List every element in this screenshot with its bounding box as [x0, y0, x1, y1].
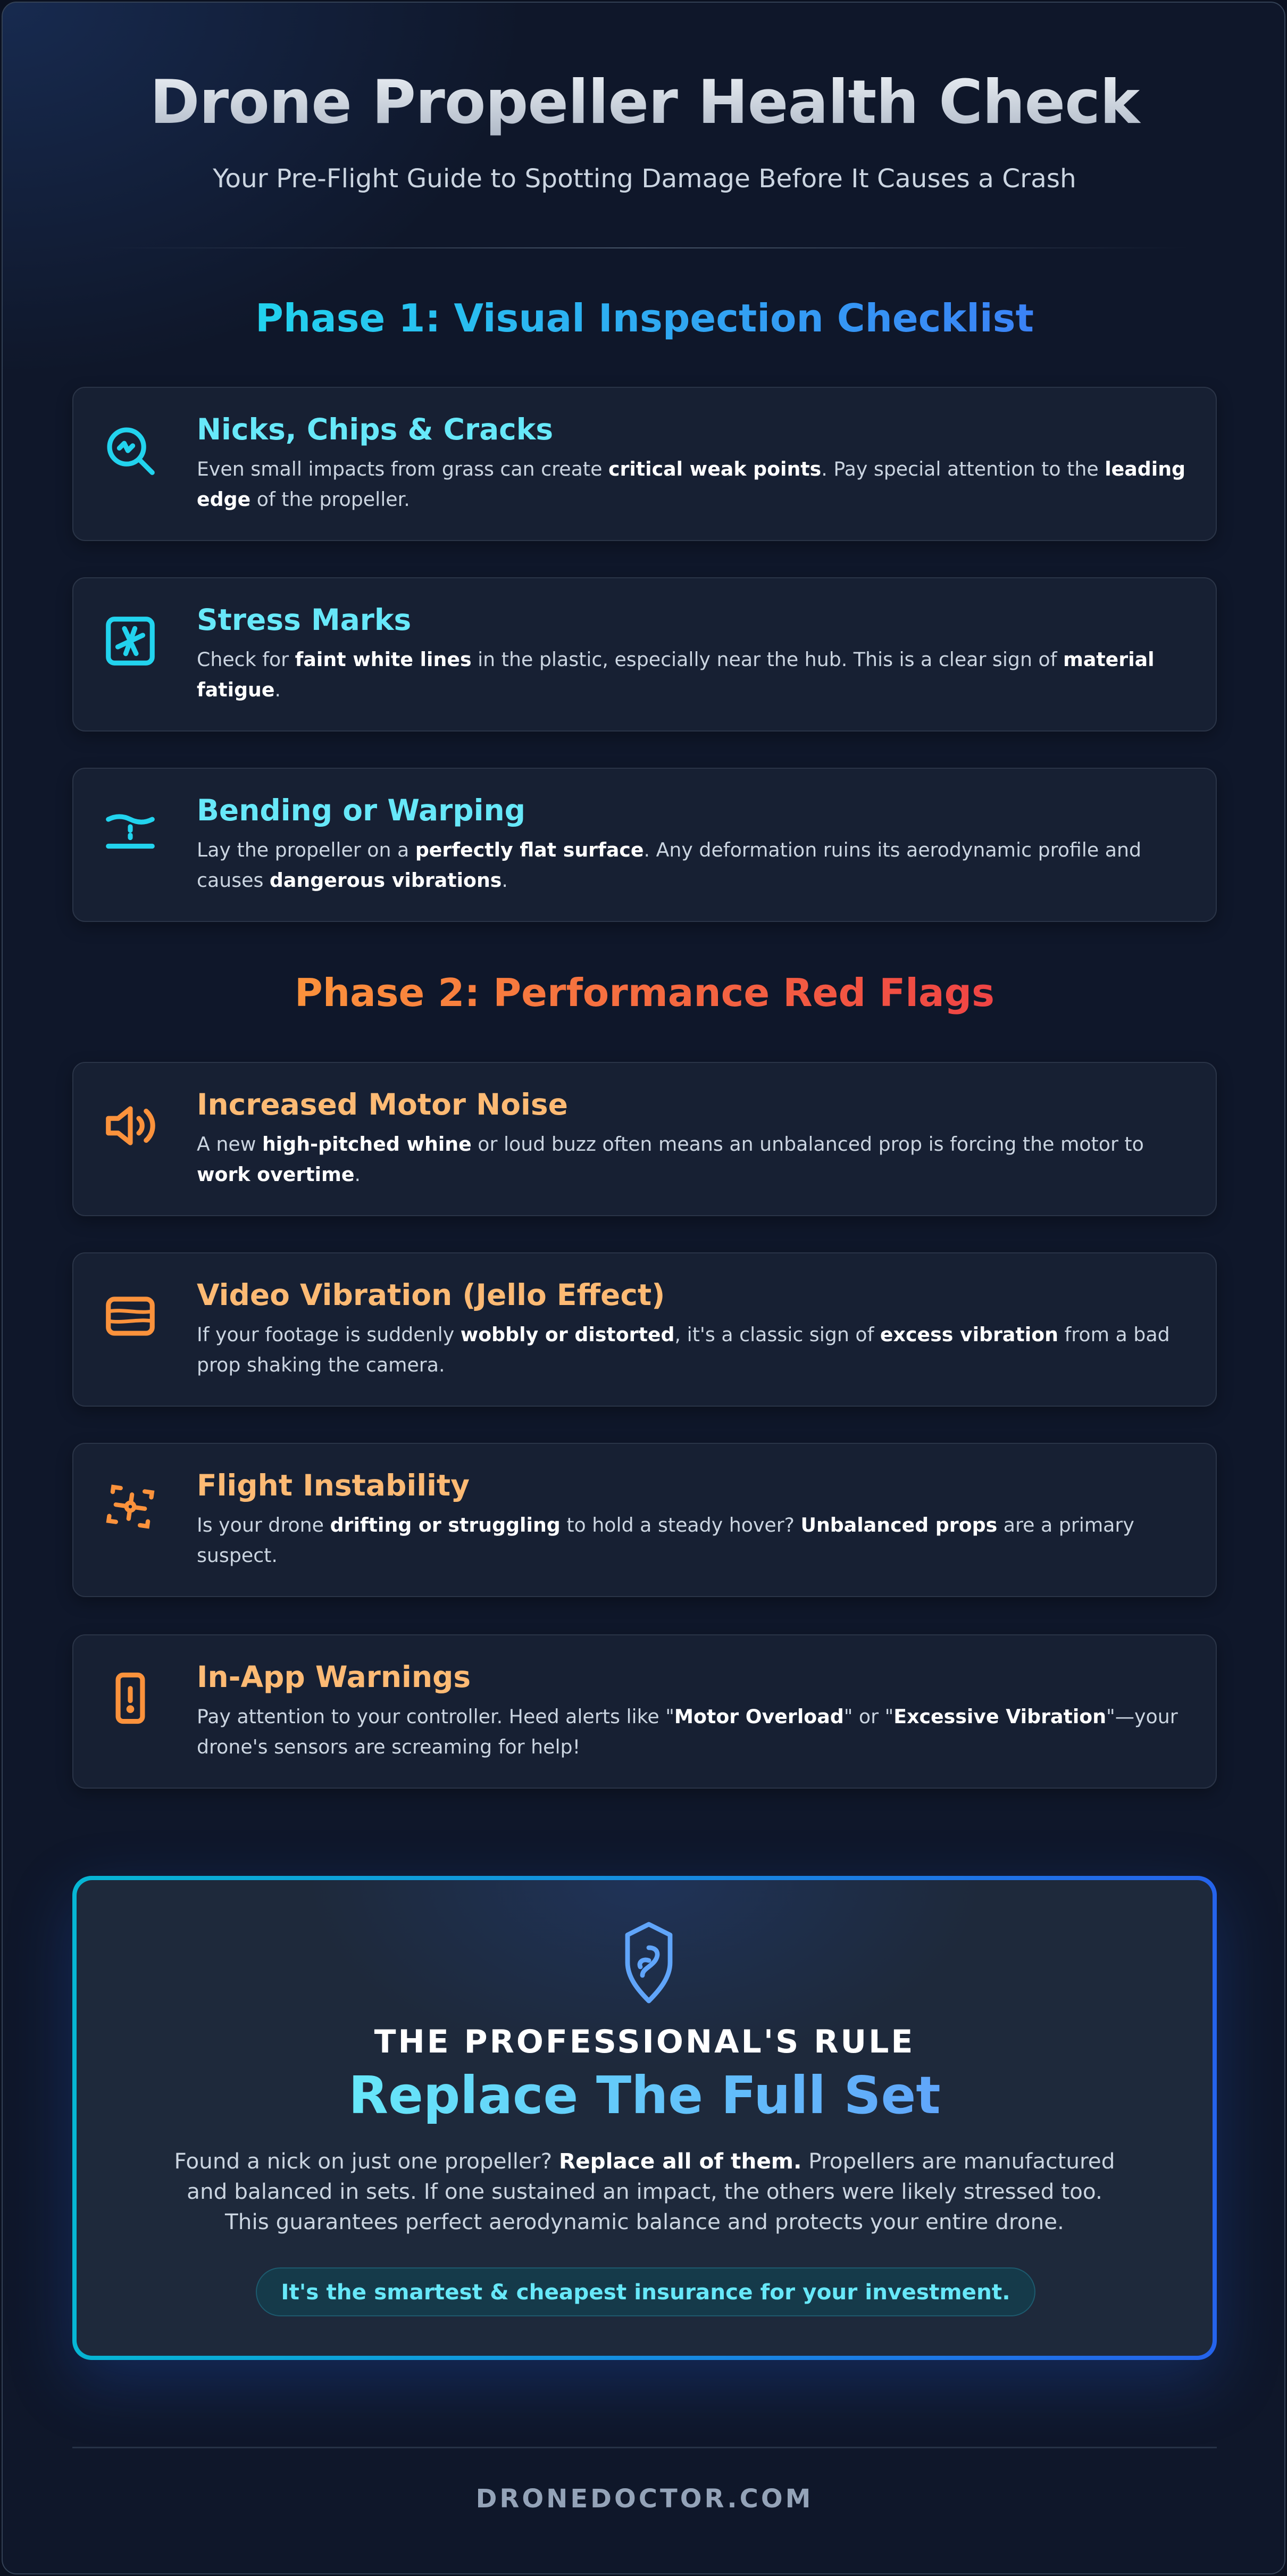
card: motor noise: A new high-pitched whine or loud buzz often means an unbalanced prop is forcing the motor to work overtime.: [197, 1133, 1144, 1186]
card: nicks chips cracks: [72, 387, 1217, 541]
subtitle: Your Pre-Flight Guide to Spotting Damage Before It Causes a Crash: [213, 164, 1076, 194]
icon: stress box: [106, 617, 155, 666]
heading: phase 1: Phase 1: Visual Inspection Checklist: [255, 296, 1034, 340]
card: in-app warnings: In-App Warnings: [197, 1660, 471, 1694]
card: nicks chips cracks: Nicks, Chips & Cracks: [197, 412, 553, 446]
callout label: THE PROFESSIONAL'S RULE: [374, 2023, 915, 2060]
card: video vibration: Video Vibration (Jello Effect): [197, 1278, 665, 1312]
icon: speaker: [106, 1106, 155, 1145]
card: in-app warnings: Pay attention to your controller. Heed alerts like "Motor Overload" or "Excessive Vibration"—your drone's sensors are screaming for help!: [197, 1705, 1178, 1758]
card: bending: Bending or Warping: [197, 793, 525, 827]
pill: insurance note: [256, 2267, 1035, 2316]
title: [3, 62, 1286, 142]
icon: shield: [625, 1922, 672, 2004]
icon: jello frame: [106, 1297, 155, 1336]
card: flight instability: Is your drone drifting or struggling to hold a steady hover? Unbalanced props are a primary suspect.: [197, 1514, 1134, 1567]
card: bending: Lay the propeller on a perfectly flat surface. Any deformation ruins its aerodynamic profile and causes dangerous vibrations.: [197, 838, 1141, 892]
title: Drone Propeller Health Check: [150, 67, 1139, 137]
card: in-app warnings: [72, 1634, 1217, 1789]
card: flight instability: [72, 1443, 1217, 1597]
card: video vibration: [72, 1252, 1217, 1407]
card: video vibration: If your footage is suddenly wobbly or distorted, it's a classic sign of excess vibration from a bad prop shaking the camera.: [197, 1323, 1170, 1376]
callout body: Found a nick on just one propeller? Replace all of them. Propellers are manufactured and balanced in sets. If one sustained an impact, the others were likely stressed too. This guarantees perfect aerodynamic balance and protects your entire drone.: [174, 2148, 1115, 2234]
heading: phase 2: Phase 2: Performance Red Flags: [295, 970, 995, 1015]
card: stress marks: [72, 577, 1217, 732]
icon: magnifier: [107, 428, 155, 475]
icon: drone drift: [106, 1484, 154, 1529]
icon: warp: [106, 814, 155, 849]
card: bending: [72, 768, 1217, 922]
card: flight instability: Flight Instability: [197, 1468, 470, 1502]
callout heading: Replace The Full Set: [348, 2065, 941, 2125]
card: motor noise: [72, 1062, 1217, 1216]
card: stress marks: Check for faint white lines in the plastic, especially near the hub. This is a clear sign of material fatigue.: [197, 648, 1155, 701]
callout: professional's rule: [72, 1876, 1217, 2360]
icon: phone alert: [116, 1673, 145, 1724]
card: nicks chips cracks: Even small impacts from grass can create critical weak points. Pay special attention to the leading edge of the propeller.: [197, 458, 1185, 511]
footer: DRONEDOCTOR.COM: [476, 2484, 813, 2514]
card: stress marks: Stress Marks: [197, 603, 411, 637]
card: motor noise: Increased Motor Noise: [197, 1087, 568, 1121]
pill: insurance note: It's the smartest & cheapest insurance for your investment.: [281, 2279, 1010, 2305]
